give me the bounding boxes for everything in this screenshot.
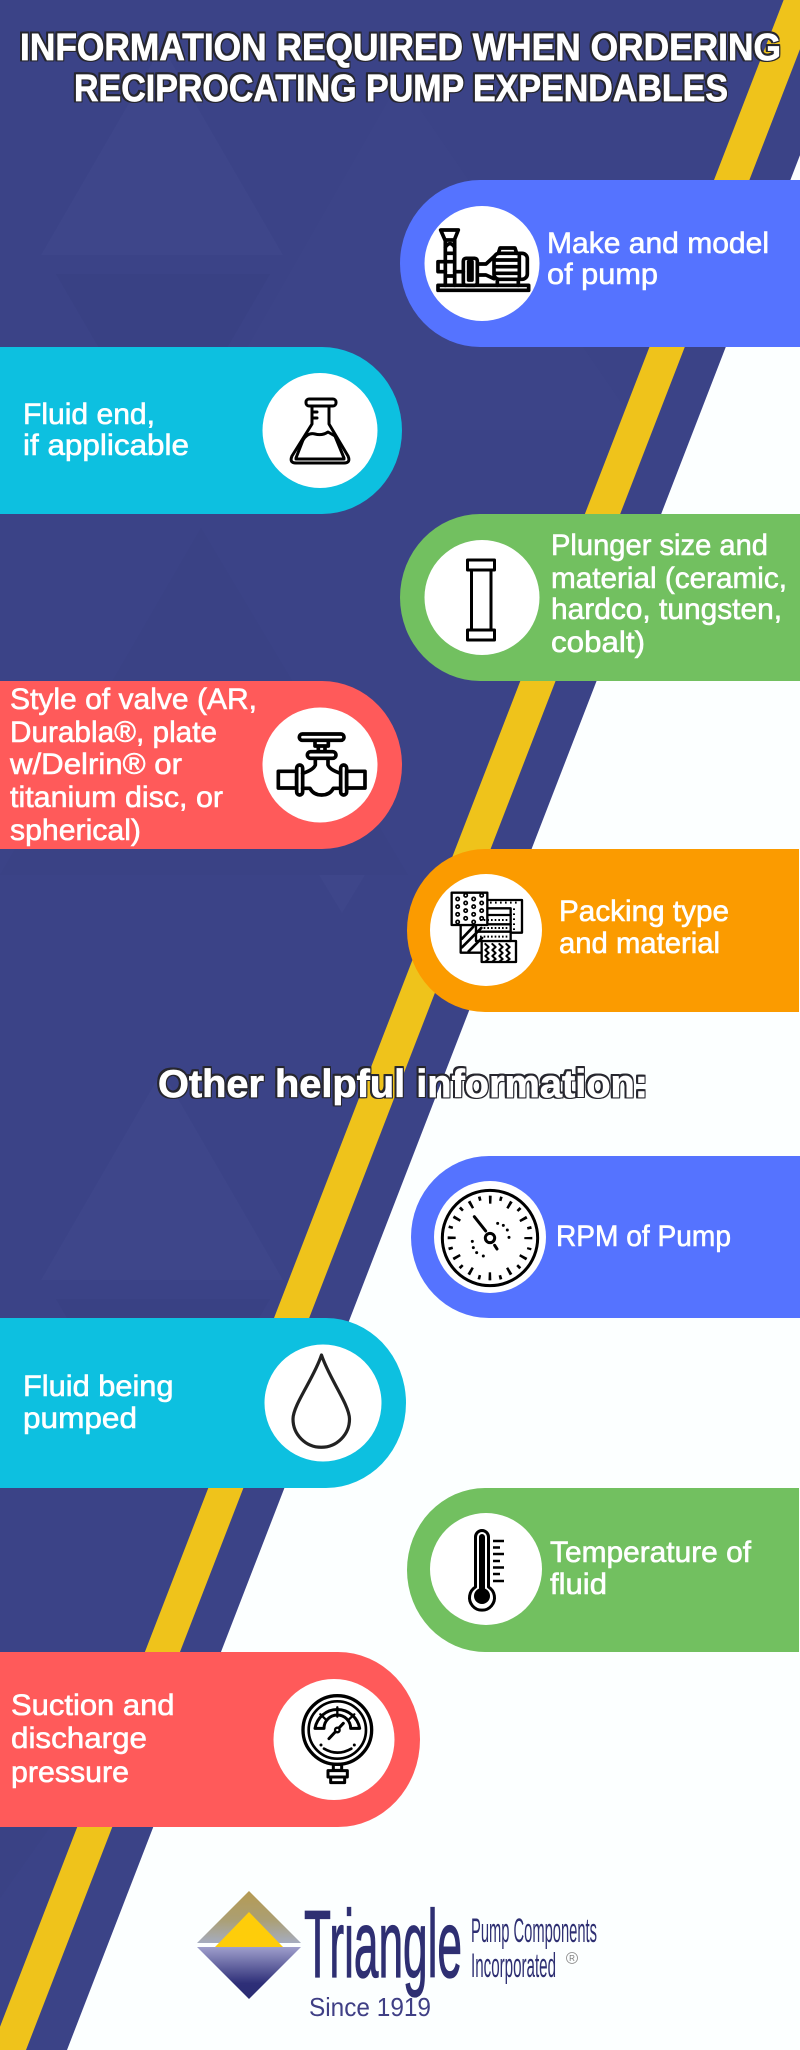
title: RECIPROCATING PUMP EXPENDABLES — [74, 68, 728, 110]
text: fluid end — [23, 398, 189, 462]
text: rpm of pump: RPM of Pump — [556, 1220, 731, 1253]
text: suction and discharge pressure: pressure — [11, 1756, 129, 1789]
text: make and model — [547, 227, 769, 291]
text: fluid being pumped: pumped — [23, 1402, 137, 1435]
text: style of valve: w/Delrin® or — [9, 748, 182, 781]
text: fluid being pumped: Fluid being — [23, 1370, 174, 1403]
text: packing type — [559, 895, 729, 960]
text: plunger: cobalt) — [551, 626, 645, 659]
text: style of valve: Durabla®, plate — [10, 716, 217, 749]
text: plunger: material (ceramic, — [551, 562, 787, 595]
text: fluid end: if applicable — [23, 429, 189, 462]
text: make and model: Make and model — [547, 227, 769, 260]
heading: other helpful information: Other helpful information: — [158, 1063, 648, 1106]
text: temperature of fluid: Temperature of — [550, 1536, 752, 1569]
text: style of valve: titanium disc, or — [10, 781, 223, 814]
panel: fluid being pumped — [0, 1318, 406, 1488]
text: style of valve: Style of valve (AR, — [10, 683, 257, 716]
text: temperature of fluid — [550, 1536, 752, 1601]
icon: packing materials — [452, 893, 522, 962]
logo: Triangle Pump Components — [197, 1891, 597, 2022]
text: style of valve — [9, 683, 257, 847]
text: suction and discharge pressure: discharge — [11, 1722, 147, 1755]
text: packing type: Packing type — [559, 895, 729, 928]
panel: rpm of pump — [411, 1156, 800, 1318]
title — [20, 27, 781, 110]
text: fluid being pumped — [23, 1370, 174, 1435]
text: packing type: and material — [559, 927, 720, 960]
panel: packing type — [407, 849, 799, 1012]
text: Pump Components — [471, 1912, 597, 1950]
panel: suction and discharge pressure — [0, 1652, 420, 1827]
text: make and model: of pump — [547, 258, 658, 291]
icon: pressure gauge — [303, 1696, 372, 1783]
icon: logo diamond — [197, 1891, 301, 1999]
icon: valve — [278, 734, 365, 795]
icon: drop — [293, 1355, 350, 1447]
icon: plunger — [468, 560, 494, 640]
text: temperature of fluid: fluid — [550, 1568, 607, 1601]
panel: temperature of fluid — [407, 1488, 799, 1652]
text: style of valve: spherical) — [10, 814, 141, 847]
icon: pump — [438, 230, 529, 290]
text: plunger — [551, 529, 787, 659]
text: suction and discharge pressure — [11, 1689, 174, 1789]
text: plunger: hardco, tungsten, — [551, 593, 782, 626]
logo: Triangle Pump Components: Triangle — [304, 1891, 462, 1998]
panel: make and model of pump — [400, 180, 800, 347]
icon: thermometer — [469, 1530, 504, 1610]
panel: fluid end — [0, 347, 402, 514]
icon: flask — [291, 399, 349, 463]
text: suction and discharge pressure: Suction and — [11, 1689, 174, 1722]
logo: Triangle Pump Components: Incorporated — [471, 1947, 556, 1985]
text: registered mark — [566, 1952, 578, 1964]
text: plunger: Plunger size and — [551, 529, 768, 562]
panel: plunger — [400, 514, 800, 681]
background: faint triangles — [0, 46, 640, 1898]
text: fluid end: Fluid end, — [23, 398, 155, 431]
icon: rpm dial — [440, 1188, 540, 1288]
text: since 1919: Since 1919 — [309, 1992, 431, 2022]
panel: style of valve — [0, 681, 402, 849]
text: registered mark: R — [569, 1954, 575, 1963]
